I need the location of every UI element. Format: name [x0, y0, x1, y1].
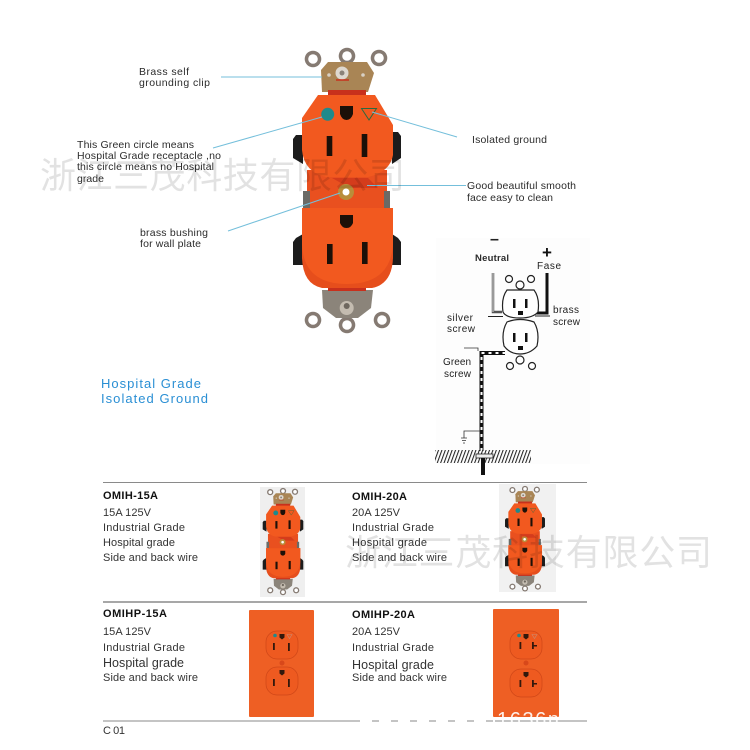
callout: brass bushing: brass bushing — [140, 227, 208, 239]
receptacle main photo — [293, 48, 401, 333]
callout: green circle meaning: This Green circle means — [77, 139, 194, 151]
product: OMIH-20A text: Hospital grade — [352, 537, 427, 549]
callout: brass self grounding clip: grounding clip — [139, 77, 210, 89]
product: OMIHP-15A text — [103, 608, 198, 684]
product: OMIH-20A text: 20A 125V — [352, 507, 401, 519]
callout: smooth face: face easy to clean — [467, 192, 553, 204]
product photo: OMIH-15A — [260, 487, 305, 597]
wiring diagram — [435, 231, 590, 475]
page number: C 01 — [103, 725, 125, 737]
product: OMIH-20A text: Side and back wire — [352, 552, 447, 564]
product: OMIHP-20A text: Industrial Grade — [352, 642, 434, 654]
watermark: bottom white fragment: 1636n — [497, 709, 559, 731]
watermark: company name middle: 浙江三茂科技有限公司 — [345, 532, 712, 573]
table rules — [103, 482, 587, 721]
product: OMIHP-15A text: Industrial Grade — [103, 642, 185, 654]
callout: brass self grounding clip — [139, 66, 210, 89]
product: OMIH-15A text: Hospital grade — [103, 537, 175, 549]
product: OMIHP-15A text: OMIHP-15A — [103, 608, 167, 620]
wiring diagram: Fase — [537, 261, 561, 272]
product: OMIH-20A text — [352, 491, 447, 564]
product: OMIH-15A text — [103, 490, 198, 564]
heading: Hospital Grade Isolated Ground: Isolated Ground — [101, 391, 208, 406]
product: OMIH-20A text: Industrial Grade — [352, 522, 434, 534]
callout: isolated ground: Isolated ground — [472, 134, 547, 146]
product: OMIHP-20A text — [352, 609, 447, 684]
wiring diagram: brass — [553, 305, 579, 316]
heading: Hospital Grade Isolated Ground: Hospital Grade — [101, 376, 201, 391]
wiring diagram: screw — [447, 324, 476, 335]
product: OMIHP-20A text: Hospital grade — [352, 658, 434, 672]
product: OMIHP-15A text: 15A 125V — [103, 626, 152, 638]
callout: brass bushing — [140, 227, 208, 250]
product: OMIH-15A text: Industrial Grade — [103, 522, 185, 534]
heading: Hospital Grade Isolated Ground — [101, 376, 208, 406]
product: OMIH-15A text: Side and back wire — [103, 552, 198, 564]
product: OMIHP-15A text: Hospital grade — [103, 656, 184, 670]
callout: green circle meaning: grade — [77, 173, 104, 185]
product photo: OMIHP-15A wall plate — [249, 610, 314, 717]
wiring diagram: Green — [443, 357, 471, 368]
wiring diagram: screw — [553, 317, 581, 328]
watermark: company name top: 浙江三茂科技有限公司 — [40, 155, 405, 196]
callout: brass bushing: for wall plate — [140, 238, 201, 250]
callout: brass self grounding clip: Brass self — [139, 66, 189, 78]
product: OMIH-20A text: OMIH-20A — [352, 491, 407, 503]
product: OMIHP-20A text: Side and back wire — [352, 672, 447, 684]
callout: green circle meaning — [77, 139, 221, 185]
product photo: OMIHP-20A wall plate — [493, 609, 559, 717]
wiring diagram: + — [542, 243, 552, 262]
wiring diagram: – — [490, 231, 499, 248]
product: OMIHP-15A text: Side and back wire — [103, 672, 198, 684]
product: OMIH-15A text: OMIH-15A — [103, 490, 158, 502]
callout: smooth face: Good beautiful smooth — [467, 180, 576, 192]
product: OMIHP-20A text: 20A 125V — [352, 626, 401, 638]
product photo: OMIH-20A — [499, 484, 556, 592]
callout: green circle meaning: Hospital Grade receptacle ,no — [77, 150, 221, 162]
wiring diagram: screw — [444, 369, 472, 380]
wiring diagram: Neutral — [475, 253, 509, 264]
product: OMIHP-20A text: OMIHP-20A — [352, 609, 415, 621]
callout: smooth face — [467, 180, 576, 204]
callout: green circle meaning: this circle means no Hospital — [77, 161, 214, 173]
product: OMIH-15A text: 15A 125V — [103, 507, 152, 519]
callout leader lines — [213, 77, 466, 231]
wiring diagram: silver — [447, 313, 474, 324]
